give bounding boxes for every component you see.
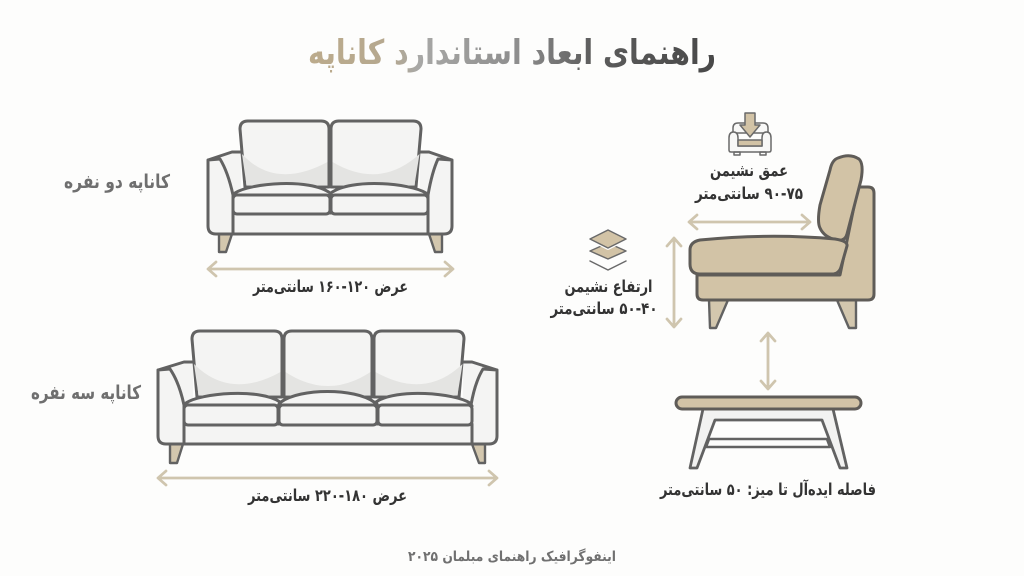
- sofa arms: [158, 361, 497, 444]
- table top: [676, 397, 861, 409]
- sofa legs: [219, 234, 442, 252]
- text: seat height: ارتفاع نشیمن: [564, 277, 652, 297]
- text: seat depth: [694, 161, 803, 204]
- seat cushions: [184, 392, 472, 425]
- arrow: seat height: [667, 238, 681, 327]
- back cushions: [240, 121, 421, 187]
- sofa base: [184, 424, 472, 444]
- text: three-seat width: عرض ۱۸۰-۲۲۰ سانتی‌متر: [247, 486, 407, 506]
- text: seat depth: عمق نشیمن: [710, 161, 788, 181]
- title: راهنمای ابعاد استاندارد کاناپه: [308, 33, 716, 73]
- arrow: distance to table: [761, 333, 775, 389]
- text: distance to table: فاصله ایده‌آل تا میز: ۵۰ سانتی‌متر: [659, 478, 876, 500]
- icon: armchair seat depth: [729, 113, 771, 155]
- illustration: side view of sofa seat: [690, 156, 874, 328]
- text: seat depth: ۹۰-۷۵ سانتی‌متر: [694, 184, 803, 204]
- backrest cushion: [818, 156, 862, 240]
- sofa base: [233, 213, 428, 234]
- illustration: coffee table: [676, 397, 861, 468]
- width arrow: three-seat sofa: [158, 471, 497, 485]
- sofa legs: [170, 444, 485, 463]
- label: three-seat sofa: کاناپه سه نفره: [31, 382, 142, 404]
- footer: اینفوگرافیک راهنمای مبلمان ۲۰۲۵: [408, 548, 616, 565]
- width arrow: two-seat sofa: [208, 262, 453, 276]
- text: two-seat width: عرض ۱۲۰-۱۶۰ سانتی‌متر: [252, 277, 408, 297]
- table shelf bars: [706, 439, 830, 447]
- text: seat height: [550, 277, 658, 319]
- sofa arms: [208, 151, 452, 234]
- table legs and frame: [690, 409, 847, 468]
- illustration: three-seat sofa: [158, 331, 497, 463]
- label: two-seat sofa: کاناپه دو نفره: [64, 171, 171, 193]
- chair frame: [697, 187, 874, 300]
- illustration: two-seat sofa: [208, 121, 452, 252]
- seat cushion: [690, 236, 847, 274]
- back cushions: [192, 331, 464, 397]
- seat cushions: [233, 184, 428, 214]
- arrow: seat depth: [689, 215, 810, 229]
- text: seat height: ۵۰-۴۰ سانتی‌متر: [550, 299, 658, 319]
- icon: layered seat height: [590, 230, 626, 270]
- chair legs: [709, 300, 856, 328]
